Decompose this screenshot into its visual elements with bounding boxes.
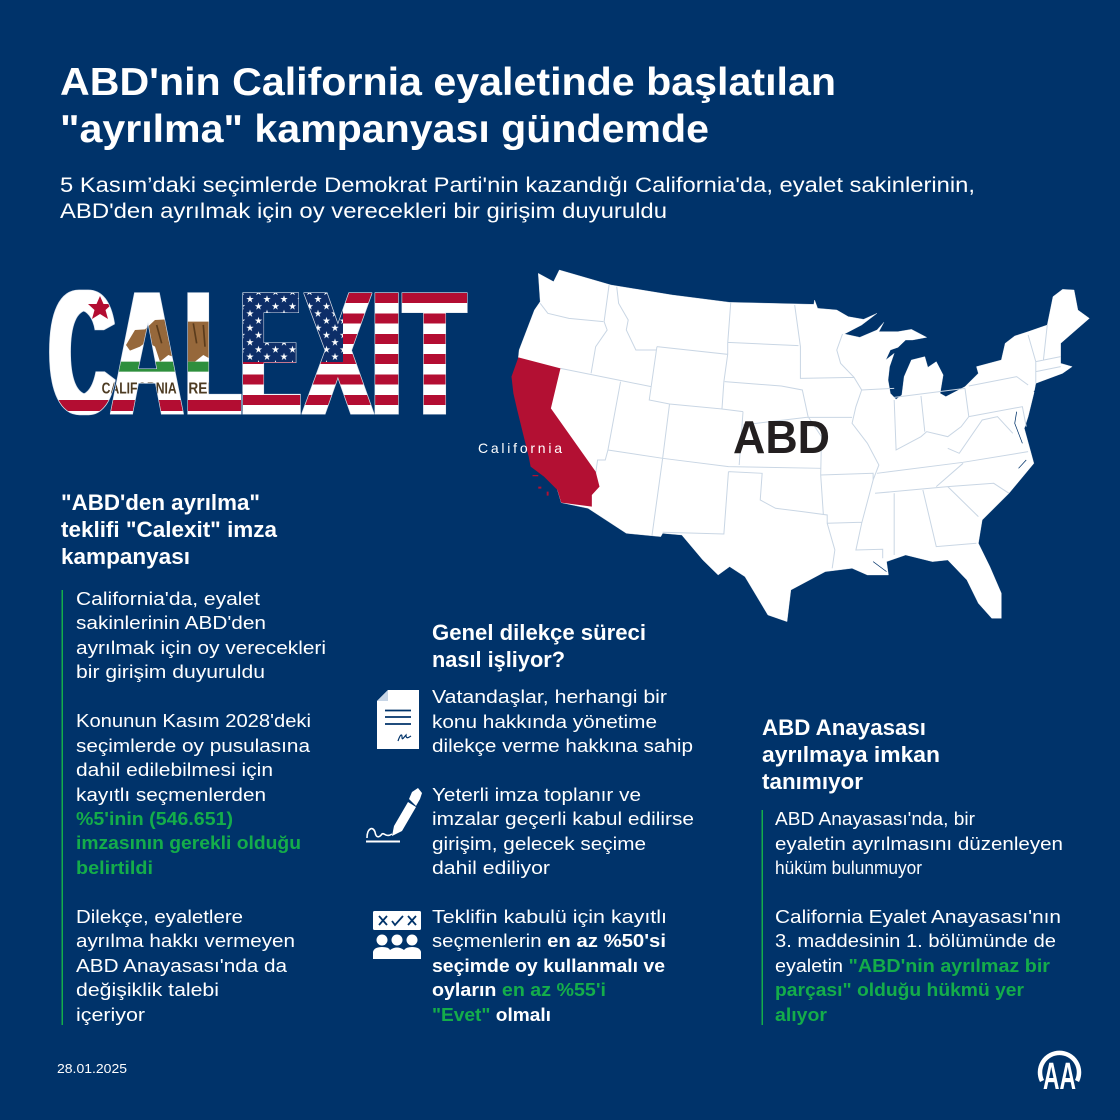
subtitle: 5 Kasım’daki seçimlerde Demokrat Parti'nin kazandığı California'da, eyalet sakinlerinin, xyxy=(60,174,975,197)
text block: constitution body: eyaletin ayrılmasını düzenleyen xyxy=(775,833,1063,854)
text block: constitution body: alıyor xyxy=(775,1004,827,1025)
text block: step 3 xyxy=(432,906,667,1025)
text block: campaign body: Dilekçe, eyaletlere xyxy=(76,906,243,927)
text block: constitution body: hüküm bulunmuyor xyxy=(775,857,922,878)
text block: campaign body: değişiklik talebi xyxy=(76,979,219,1000)
text block: constitution body: eyaletin "ABD'nin ayrılmaz bir xyxy=(775,955,1050,976)
text block: step 1: dilekçe verme hakkına sahip xyxy=(432,735,693,756)
subtitle xyxy=(60,174,975,223)
panel: petition process xyxy=(366,620,694,1025)
map: state borders xyxy=(540,285,1061,568)
text block: campaign body: Konunun Kasım 2028'deki xyxy=(76,710,311,731)
logo: CALEXIT lettering filled with flags: REPUBLIC xyxy=(188,380,258,397)
date: 28.01.2025 xyxy=(57,1062,127,1076)
heading: campaign xyxy=(61,490,278,569)
text block: step 2: imzalar geçerli kabul edilirse xyxy=(432,808,694,829)
icon: voters and ballot xyxy=(373,911,421,959)
text block: step 3: "Evet" olmalı xyxy=(432,1004,551,1025)
heading: petition: Genel dilekçe süreci xyxy=(432,620,646,645)
panel: US constitution xyxy=(762,715,1063,1025)
heading: petition xyxy=(432,620,646,672)
text block: campaign body: bir girişim duyuruldu xyxy=(76,661,265,682)
text block: constitution body: California Eyalet Anayasası'nın xyxy=(775,906,1061,927)
heading: constitution: ABD Anayasası xyxy=(762,715,926,740)
map: Chesapeake and sounds xyxy=(873,380,1051,572)
text block: constitution body: parçası" olduğu hükmü yer xyxy=(775,979,1024,1000)
title: "ayrılma" kampanyası gündemde xyxy=(60,108,709,151)
text block: constitution body: 3. maddesinin 1. bölümünde de xyxy=(775,930,1056,951)
accent line xyxy=(762,810,763,1025)
subtitle: ABD'den ayrılmak için oy verecekleri bir girişim duyuruldu xyxy=(60,200,667,223)
logo: AA: AA xyxy=(1043,1056,1076,1098)
text block: step 3: seçimde oy kullanmalı ve xyxy=(432,955,665,976)
map: United States xyxy=(478,270,1089,622)
icon: document xyxy=(377,690,419,749)
text block: step 2 xyxy=(432,784,694,878)
panel: Calexit campaign xyxy=(61,490,326,1025)
text block: step 2: girişim, gelecek seçime xyxy=(432,833,646,854)
accent line xyxy=(62,590,63,1025)
map: land outline xyxy=(518,270,1089,622)
text block: campaign body: içeriyor xyxy=(76,1004,145,1025)
text block: step 1: konu hakkında yönetime xyxy=(432,711,657,732)
text block: step 3: oyların en az %55'i xyxy=(432,979,606,1000)
logo: AA xyxy=(1040,1053,1079,1098)
heading: constitution: ayrılmaya imkan xyxy=(762,742,940,767)
text block: campaign body: ayrılma hakkı vermeyen xyxy=(76,930,295,951)
map label: California: California xyxy=(478,440,563,456)
heading: campaign: "ABD'den ayrılma" xyxy=(61,490,260,515)
icon: pen signing xyxy=(366,788,422,842)
heading: constitution: tanımıyor xyxy=(762,769,863,794)
heading: petition: nasıl işliyor? xyxy=(432,647,565,672)
text block: step 3: seçmenlerin en az %50'si xyxy=(432,930,666,951)
text block: constitution body: ABD Anayasası'nda, bir xyxy=(775,808,975,829)
text block: step 3: Teklifin kabulü için kayıtlı xyxy=(432,906,667,927)
text block: campaign body: dahil edilebilmesi için xyxy=(76,759,273,780)
logo: CALEXIT lettering filled with flags: CALIFORNIA xyxy=(102,380,177,397)
text block: campaign body: seçimlerde oy pusulasına xyxy=(76,735,311,756)
text block: campaign body: imzasının gerekli olduğu xyxy=(76,832,301,853)
heading: campaign: kampanyası xyxy=(61,544,190,569)
logo: CALEXIT lettering filled with flags xyxy=(49,290,468,416)
title: ABD'nin California eyaletinde başlatılan xyxy=(60,61,836,104)
text block: constitution body xyxy=(775,808,1063,1025)
text block: campaign body: ABD Anayasası'nda da xyxy=(76,955,288,976)
map: California highlighted xyxy=(511,357,600,507)
heading: constitution xyxy=(762,715,940,794)
text block: step 2: dahil ediliyor xyxy=(432,857,550,878)
text block: campaign body: sakinlerinin ABD'den xyxy=(76,612,266,633)
heading: campaign: teklifi "Calexit" imza xyxy=(61,517,278,542)
text block: campaign body: kayıtlı seçmenlerden xyxy=(76,784,266,805)
text block: campaign body: belirtildi xyxy=(76,857,153,878)
text block: campaign body: %5'inin (546.651) xyxy=(76,808,233,829)
text block: step 1 xyxy=(432,686,693,756)
text block: step 2: Yeterli imza toplanır ve xyxy=(432,784,641,805)
title xyxy=(60,61,836,151)
text block: campaign body: California'da, eyalet xyxy=(76,588,260,609)
text block: step 1: Vatandaşlar, herhangi bir xyxy=(432,686,667,707)
text block: campaign body: ayrılmak için oy verecekleri xyxy=(76,637,326,658)
text block: campaign body xyxy=(76,588,326,1025)
map label: ABD: ABD xyxy=(733,411,830,463)
